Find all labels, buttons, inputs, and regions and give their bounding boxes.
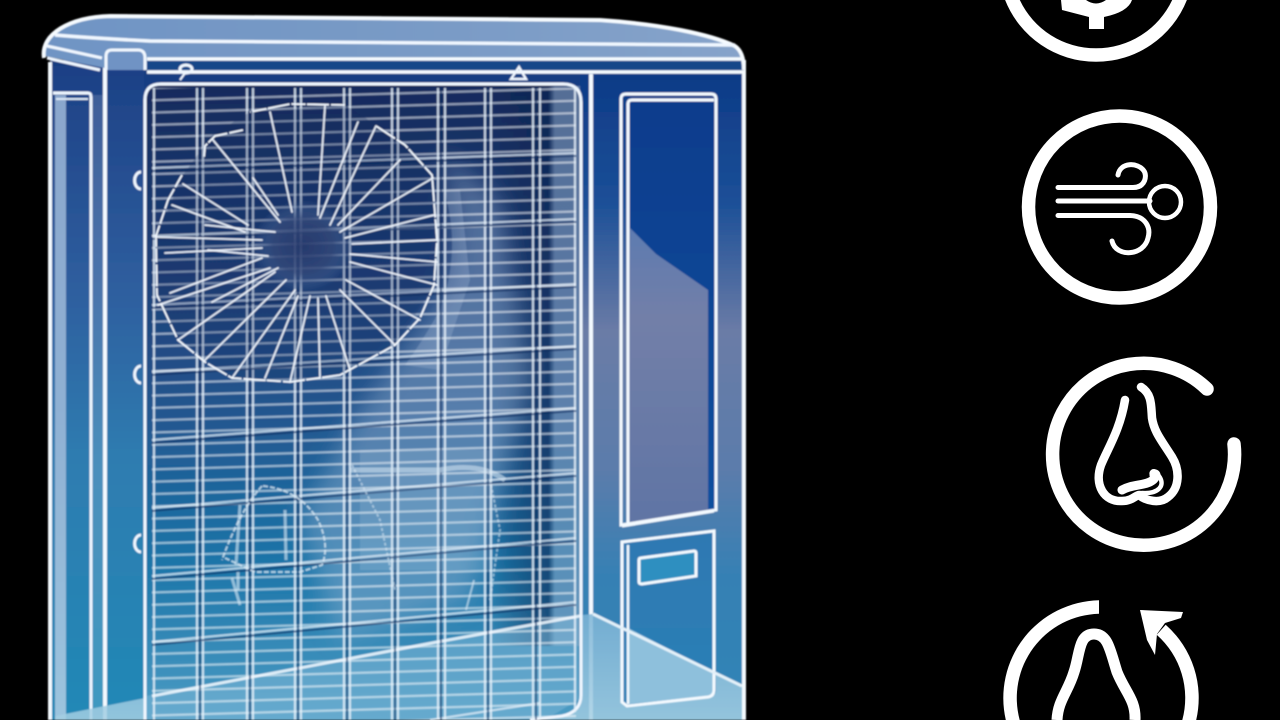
door upper outline <box>621 94 716 525</box>
fan grille <box>145 84 581 720</box>
grille horizontal bars <box>152 153 580 720</box>
vent slot <box>639 551 696 584</box>
right edge <box>742 60 746 720</box>
door lower panel <box>622 531 716 706</box>
ghost internal compressor <box>222 450 505 610</box>
lid outline <box>44 16 744 70</box>
door upper fill <box>628 100 715 525</box>
door haze shape <box>630 228 708 525</box>
mounting clips <box>135 65 526 552</box>
unit body <box>50 60 744 720</box>
fan blades <box>157 106 437 382</box>
light haze <box>300 150 530 640</box>
fan <box>156 104 437 382</box>
fan outer rim <box>156 104 437 382</box>
haze crescent behind fan <box>405 190 470 370</box>
icon: pear cycle circle <box>1003 600 1199 720</box>
floor through lower panel <box>628 628 714 704</box>
side panel <box>580 72 744 720</box>
dark gaps between grid cells <box>152 88 576 720</box>
horizontal louvers <box>152 88 576 720</box>
icon: dollar cost circle <box>1005 0 1187 62</box>
icon: nose circle <box>1053 363 1235 545</box>
air conditioner unit <box>43 16 744 720</box>
grille frame <box>145 84 581 720</box>
icons column <box>1003 0 1235 720</box>
floor plate <box>55 614 742 720</box>
corner cap <box>106 50 145 70</box>
left side post <box>50 60 144 720</box>
fan hub <box>253 200 353 292</box>
grille side shade <box>490 86 580 646</box>
service door <box>593 94 742 706</box>
fan disc shade <box>156 105 437 382</box>
floor edge line <box>593 614 742 686</box>
floor seen through grille <box>146 616 578 720</box>
grille vertical bars <box>154 88 575 720</box>
icon: wind circle <box>1028 116 1210 298</box>
top lid <box>43 16 744 72</box>
